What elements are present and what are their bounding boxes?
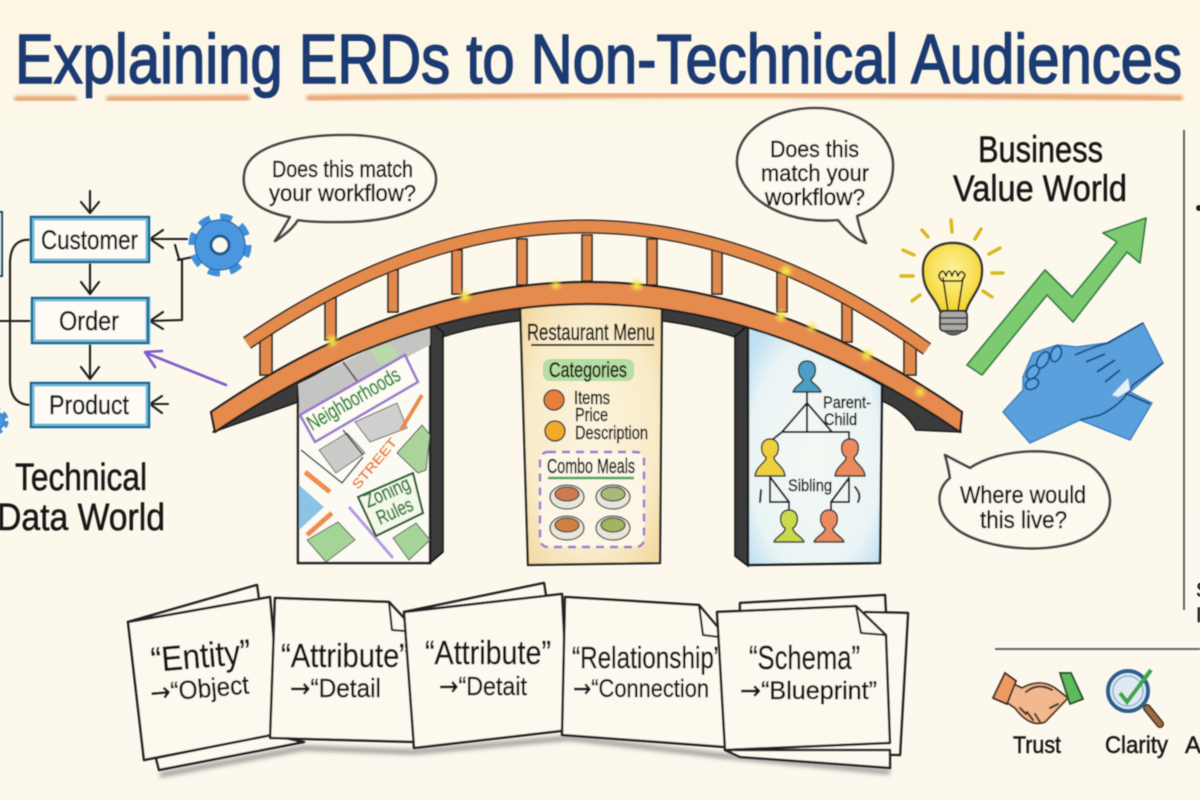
divider line bbox=[1183, 130, 1185, 610]
page: Entity: →“Object bbox=[149, 669, 251, 709]
cropped right-edge text bbox=[1196, 205, 1200, 627]
page: Attribute (Detail): “Attribute” bbox=[281, 637, 409, 674]
people icons bbox=[755, 361, 865, 542]
page: Entity bbox=[128, 597, 282, 760]
icon: partial gear left edge bbox=[0, 410, 6, 432]
page: Schema bbox=[717, 606, 890, 750]
icon: Trust handshake bbox=[993, 673, 1083, 723]
box: Product: Product bbox=[49, 390, 129, 420]
icon: green growth arrow bbox=[967, 218, 1146, 375]
categories pill: Categories bbox=[549, 359, 627, 382]
page: Schema: →“Blueprint” bbox=[740, 676, 877, 705]
icon: blue clasped hands bbox=[1003, 323, 1163, 443]
label: Zoning Rules: Rules bbox=[373, 494, 417, 530]
label: Neighborhoods: Neighborhoods bbox=[303, 363, 405, 435]
speech bubble: middle bbox=[737, 108, 893, 243]
fairy lights bbox=[327, 266, 924, 396]
panel: neighborhood map pillar bbox=[298, 320, 430, 563]
speech bubble: right bbox=[940, 451, 1110, 548]
speech bubble: middle: workflow? bbox=[764, 184, 865, 210]
label: Trust: Trust bbox=[1013, 732, 1061, 759]
page: Entity: “Entity” bbox=[149, 632, 252, 680]
page: Attribute (Detail): →“Detail bbox=[290, 673, 381, 704]
menu heading: Restaurant Menu bbox=[527, 319, 655, 345]
tree labels bbox=[788, 393, 871, 495]
bridge railing posts bbox=[260, 235, 916, 375]
speech bubble: middle: match your bbox=[761, 160, 869, 186]
speech bubble: left: Does this match bbox=[272, 156, 413, 182]
bridge top rail bbox=[247, 226, 927, 349]
panel: bridge bbox=[211, 226, 962, 566]
tree labels: Parent- bbox=[823, 393, 871, 412]
speech bubble: middle: Does this bbox=[770, 136, 859, 162]
bridge underside shadow bbox=[213, 298, 961, 432]
plates of food bbox=[550, 485, 630, 540]
back sheets bbox=[128, 583, 908, 770]
speech bubble: left: your workflow? bbox=[269, 180, 416, 206]
page: Schema: “Schema” bbox=[749, 639, 860, 676]
heading: business value world bbox=[953, 129, 1127, 209]
heading: technical data world: Technical bbox=[15, 457, 147, 499]
panel: family tree pillar bbox=[748, 326, 882, 565]
icon: gear bbox=[193, 218, 247, 272]
icon: light bulb bbox=[901, 220, 1003, 335]
page: Relationship: →“Connection bbox=[573, 674, 709, 703]
page: Attribute (Detait) bbox=[404, 594, 569, 748]
speech bubble: left bbox=[244, 135, 436, 241]
label: street scribble: STREET bbox=[349, 435, 400, 492]
page: Relationship bbox=[562, 597, 727, 747]
heading: technical data world bbox=[0, 457, 165, 539]
divider line lower right bbox=[995, 648, 1200, 650]
speech bubble: right: this live? bbox=[980, 507, 1067, 534]
page: Attribute (Detait): “Attribute” bbox=[425, 634, 551, 671]
combo meals box: Combo Meals bbox=[547, 456, 635, 478]
box: Customer bbox=[31, 217, 149, 262]
partial box left edge bbox=[0, 212, 2, 276]
speech bubble: right: Where would bbox=[960, 482, 1086, 509]
pier: left dark side bbox=[430, 322, 443, 563]
panel: vocabulary pages bbox=[128, 583, 908, 775]
tree lines bbox=[760, 392, 859, 512]
connector lines and arrows bbox=[0, 191, 193, 413]
icon: Clarity magnifier bbox=[1108, 670, 1160, 724]
heading: business value world: Value World bbox=[953, 168, 1127, 209]
bridge deck bbox=[211, 282, 962, 432]
label: Neighborhoods bbox=[300, 355, 418, 442]
pier: right dark side bbox=[735, 326, 748, 566]
tree labels: Child bbox=[824, 410, 857, 429]
page: Attribute (Detail) bbox=[270, 598, 417, 742]
box: Order: Order bbox=[59, 306, 119, 336]
label: Zoning Rules bbox=[358, 473, 423, 536]
arrow: purple pointer bbox=[145, 351, 226, 385]
menu items list: Items bbox=[574, 388, 610, 408]
panel: restaurant menu pillar bbox=[520, 300, 662, 565]
page shadows bbox=[160, 610, 894, 775]
heading: business value world: Business bbox=[978, 129, 1103, 170]
menu items list: Description bbox=[575, 423, 648, 443]
box: Product bbox=[31, 383, 149, 427]
heading: technical data world: Data World bbox=[0, 497, 165, 539]
menu items list: Price bbox=[575, 405, 608, 425]
tree labels: Sibling bbox=[788, 476, 832, 495]
page: Attribute (Detait): →“Detait bbox=[439, 671, 528, 702]
page: Relationship: “Relationship” bbox=[572, 640, 722, 675]
menu items list bbox=[544, 388, 648, 443]
box: Order bbox=[32, 298, 148, 343]
label: Clarity: Clarity bbox=[1105, 732, 1168, 759]
combo meals box bbox=[540, 452, 644, 547]
panel: technical data world diagram bbox=[0, 191, 247, 432]
box: Customer: Customer bbox=[41, 225, 138, 255]
label: Zoning Rules: Zoning bbox=[361, 473, 414, 513]
